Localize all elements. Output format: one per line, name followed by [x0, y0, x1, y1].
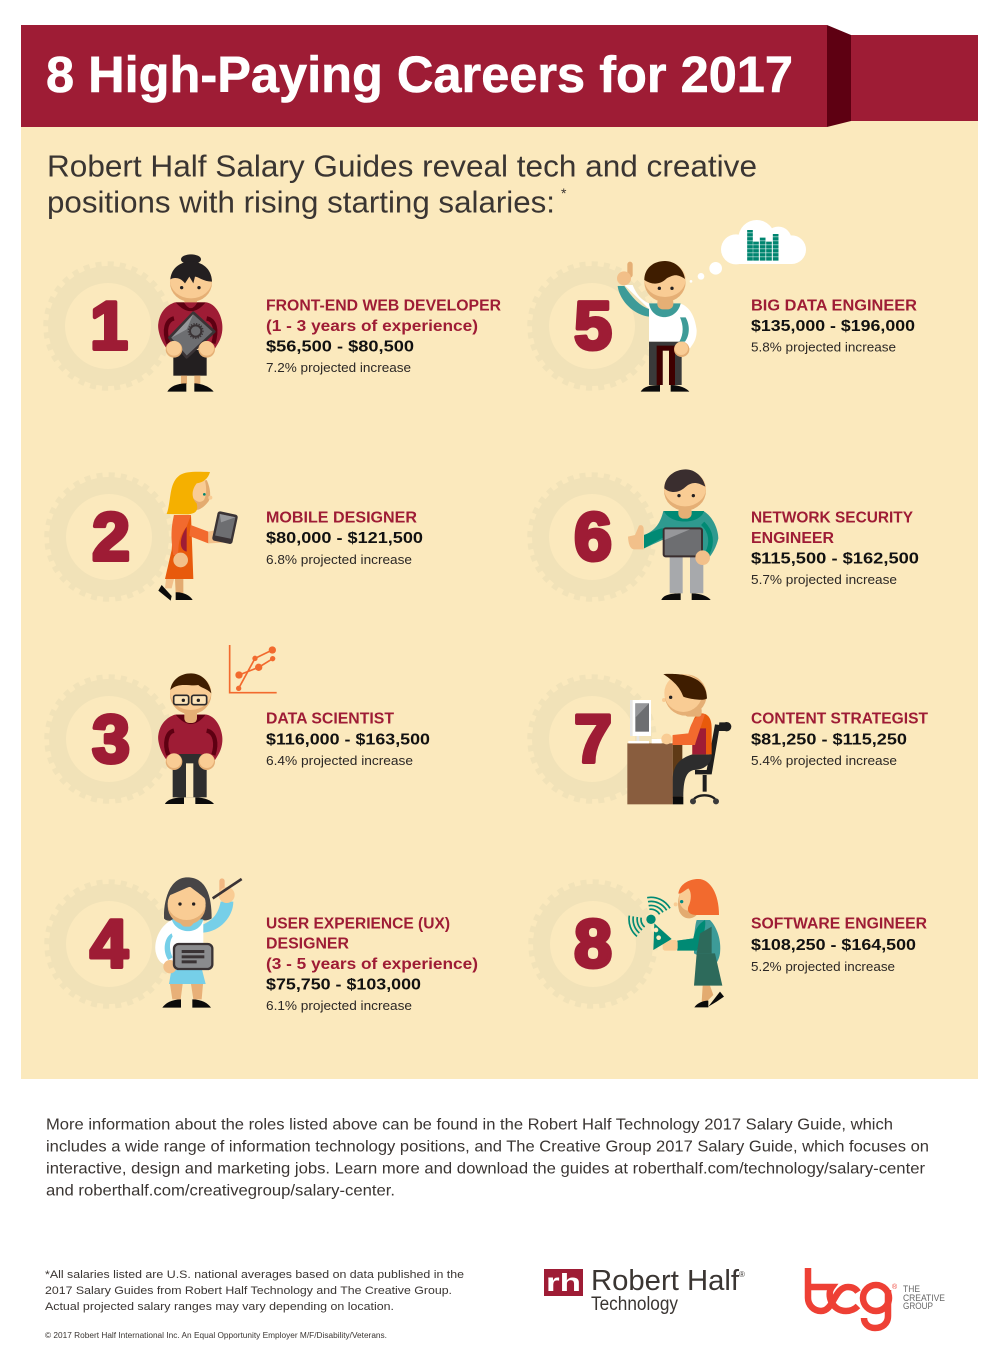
text: career 6: $115,500 - $162,500	[751, 550, 919, 568]
logo: The Creative Group	[808, 1268, 945, 1328]
icon: network security engineer with laptop	[628, 469, 718, 600]
panel: career 7	[530, 674, 928, 804]
text: career 7: $81,250 - $115,250	[751, 732, 907, 748]
panel: career 3	[48, 645, 430, 804]
text: career 4: $75,750 - $103,000	[266, 976, 421, 994]
icon: big data engineer with cloud	[617, 220, 806, 392]
text: career 1: 7.2% projected increase	[266, 360, 411, 375]
copyright: © 2017 Robert Half International Inc. An Equal Opportunity Employer M/F/Disability/Veterans.	[45, 1331, 387, 1340]
icon: content strategist at desk	[627, 674, 731, 804]
text: career 3: $116,000 - $163,500	[266, 732, 430, 748]
gear number 7: 7	[574, 701, 612, 777]
gear number 2	[48, 476, 170, 598]
text: career 2: MOBILE DESIGNER	[266, 510, 418, 526]
gear number 4: 4	[90, 906, 128, 982]
text: career 8: SOFTWARE ENGINEER	[751, 916, 928, 932]
text: career 3	[266, 710, 430, 768]
panel: career 1	[46, 254, 502, 392]
text: career 7: 5.4% projected increase	[751, 753, 897, 768]
gear number 5: 5	[574, 288, 612, 364]
logo: The Creative Group: ®	[892, 1283, 898, 1291]
text block: footnote: 2017 Salary Guides from Robert Half Technology and The Creative Group.	[45, 1285, 452, 1297]
logo: Robert Half Technology: Technology	[591, 1294, 678, 1315]
gear number 8	[532, 882, 654, 1006]
gear number 8: 8	[574, 906, 612, 982]
text: career 4	[266, 916, 478, 1013]
text: career 2	[266, 510, 423, 567]
text block: more information	[46, 1116, 929, 1200]
icon: mobile designer with phone	[158, 472, 238, 601]
logo: Robert Half Technology	[544, 1265, 745, 1315]
text: career 8: 5.2% projected increase	[751, 959, 895, 974]
icon: UX designer with stylus	[155, 877, 242, 1008]
text: career 2: 6.8% projected increase	[266, 552, 412, 567]
panel: career 2	[48, 472, 423, 601]
text: career 6	[751, 510, 919, 587]
text: career 4: DESIGNER	[266, 936, 350, 952]
gear number 1: 1	[90, 288, 128, 364]
text: career 1: $56,500 - $80,500	[266, 338, 414, 356]
text block: more information: interactive, design and marketing jobs. Learn more and download the guides at roberthalf.com/technology/salary-center	[46, 1160, 925, 1178]
icon: data scientist with chart	[158, 645, 277, 804]
gear number 7	[530, 678, 654, 800]
text: career 3: DATA SCIENTIST	[266, 710, 394, 728]
text: career 1: (1 - 3 years of experience)	[266, 318, 478, 335]
subtitle	[47, 148, 757, 220]
text block: footnote: Actual projected salary ranges may vary depending on location.	[45, 1301, 394, 1313]
subtitle: *	[561, 185, 567, 201]
text: career 2: $80,000 - $121,500	[266, 530, 423, 547]
gear number 6	[530, 476, 654, 598]
text: career 8: $108,250 - $164,500	[751, 937, 916, 954]
gear number 6: 6	[574, 499, 612, 575]
panel: career 4	[48, 877, 478, 1013]
panel: career 6	[530, 469, 919, 600]
logo: The Creative Group: CREATIVE	[903, 1293, 945, 1303]
gear number 3	[48, 678, 170, 800]
text: career 5: 5.8% projected increase	[751, 340, 896, 354]
icon: software engineer with signal device	[629, 879, 724, 1007]
logo: The Creative Group: GROUP	[903, 1301, 933, 1311]
gear number 4	[48, 882, 170, 1006]
text: career 5: $135,000 - $196,000	[751, 318, 915, 335]
panel: career 5	[530, 220, 918, 392]
text block: footnote	[45, 1269, 464, 1313]
text block: more information: More information about the roles listed above can be found in the Robert Half Technology 2017 Salary Guide, which	[46, 1116, 893, 1134]
icon: web developer with tablet	[158, 254, 222, 392]
text block: more information: and roberthalf.com/creativegroup/salary-center.	[46, 1182, 395, 1200]
text: career 4: 6.1% projected increase	[266, 998, 412, 1013]
logo: The Creative Group: THE	[903, 1284, 920, 1294]
text: career 5: BIG DATA ENGINEER	[751, 298, 918, 314]
text: career 6: NETWORK SECURITY	[751, 510, 913, 526]
text block: more information: includes a wide range of information technology positions, and The Creative Group 2017 Salary Guide, which focuses on	[46, 1138, 929, 1156]
panel: career 8	[532, 879, 928, 1007]
gear number 5	[530, 264, 654, 388]
text: career 3: 6.4% projected increase	[266, 753, 413, 768]
text: career 8	[751, 916, 928, 974]
text: career 6: ENGINEER	[751, 530, 835, 547]
text block: footnote: *All salaries listed are U.S. national averages based on data published in the	[45, 1269, 464, 1281]
logo: Robert Half Technology: Robert Half	[591, 1265, 740, 1297]
subtitle: positions with rising starting salaries:	[47, 184, 555, 220]
gear number 3: 3	[92, 701, 130, 777]
logo: Robert Half Technology: ®	[739, 1270, 745, 1279]
gear number 2: 2	[92, 499, 130, 575]
text: career 1	[266, 298, 502, 375]
text: career 4: USER EXPERIENCE (UX)	[266, 916, 450, 932]
subtitle: Robert Half Salary Guides reveal tech and creative	[47, 148, 757, 184]
title: 8 High-Paying Careers for 2017	[46, 46, 793, 103]
gear number 1	[46, 264, 170, 388]
text: career 7: CONTENT STRATEGIST	[751, 710, 928, 728]
text: career 7	[751, 710, 928, 768]
title banner	[21, 25, 978, 127]
text: career 1: FRONT-END WEB DEVELOPER	[266, 298, 502, 314]
logo: Robert Half Technology: rh	[546, 1269, 581, 1297]
text: career 6: 5.7% projected increase	[751, 572, 897, 587]
text: career 4: (3 - 5 years of experience)	[266, 956, 478, 973]
text: career 5	[751, 298, 918, 354]
cream background panel	[21, 121, 978, 1079]
